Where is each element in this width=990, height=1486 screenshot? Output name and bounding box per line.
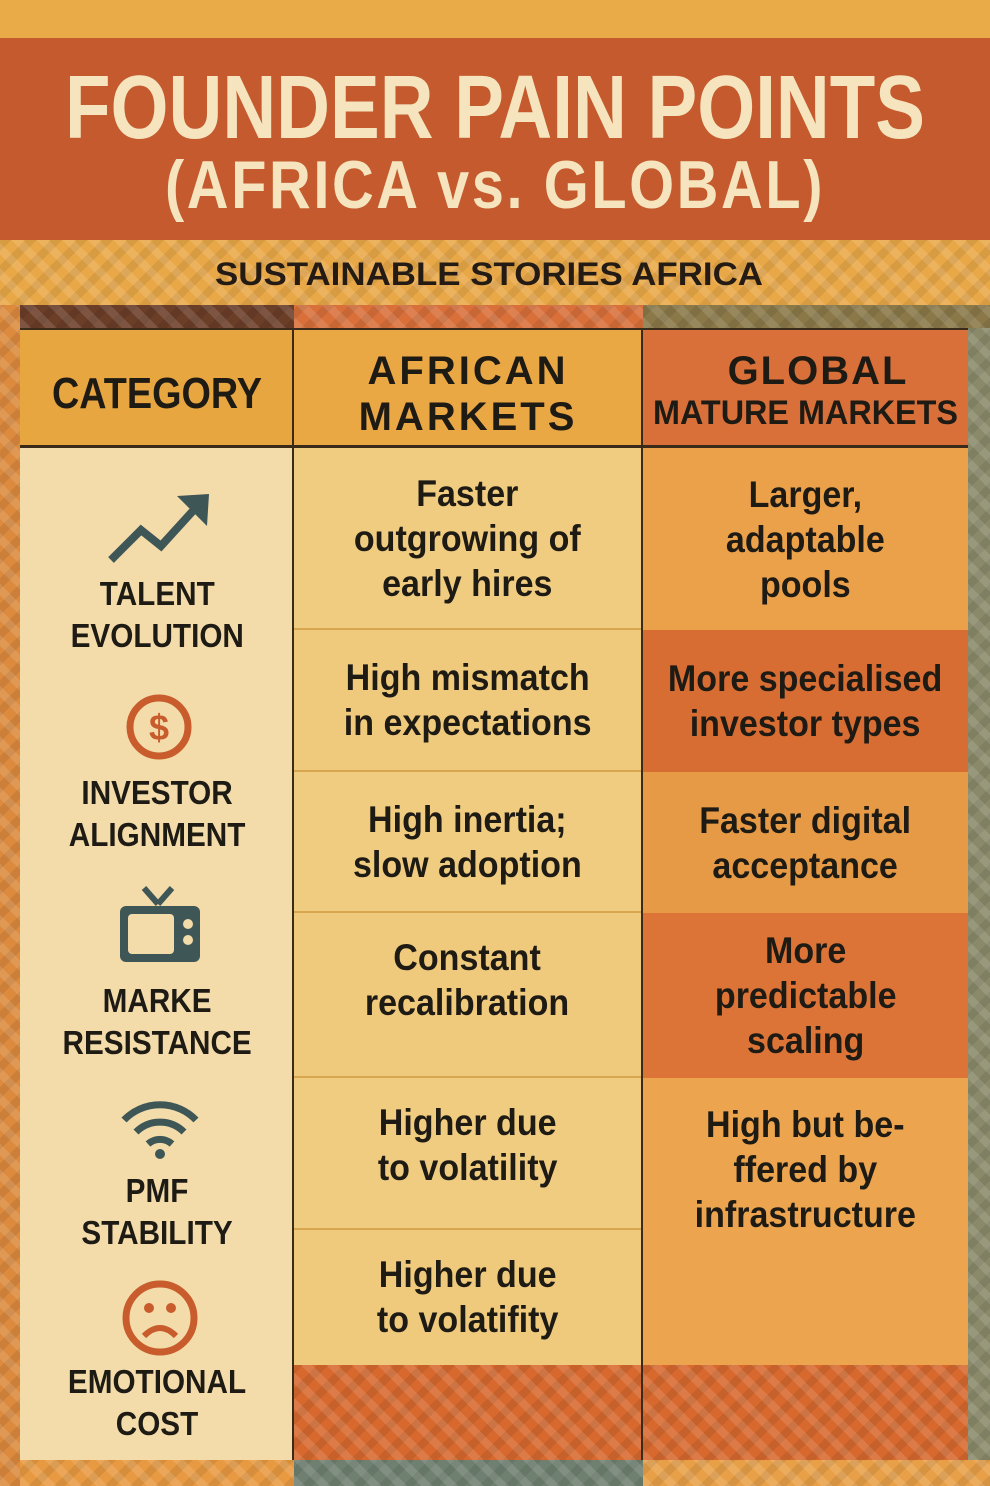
- cell a5: to volatility: [378, 1147, 557, 1188]
- cell a6: to volatiﬁty: [377, 1299, 558, 1340]
- cell a2: in expectations: [344, 702, 591, 743]
- cell g1: pools: [760, 564, 851, 604]
- label: pmf stability: STABILITY: [81, 1214, 233, 1251]
- cell g3: acceptance: [713, 844, 898, 886]
- label: talent evolution: EVOLUTION: [70, 617, 244, 654]
- cell g4: More: [765, 930, 846, 971]
- cell g5: ffered by: [734, 1149, 877, 1190]
- cell a2: High mismatch: [345, 657, 589, 698]
- african column cells: [294, 448, 643, 1460]
- icon: trend arrow: [108, 494, 209, 563]
- label: investor alignment: INVESTOR: [81, 774, 233, 811]
- title: (AFRICA vs. GLOBAL): [165, 147, 825, 223]
- cell g5: High but be-: [706, 1104, 905, 1145]
- category column: [20, 448, 294, 1460]
- title: [65, 58, 925, 223]
- subtitle: SUSTAINABLE STORIES AFRICA: [215, 256, 763, 292]
- title band: [0, 38, 990, 240]
- pattern strips: [20, 305, 294, 328]
- cell g5: infrastructure: [695, 1194, 916, 1235]
- header: global mature markets: MATURE MARKETS: [653, 394, 958, 432]
- label: emotional cost: [68, 1363, 246, 1442]
- cell g2: investor types: [690, 703, 921, 744]
- icon: wifi: [122, 1101, 198, 1159]
- icon: sad face: [122, 1280, 198, 1356]
- cell g3: [643, 772, 968, 913]
- label: investor alignment: ALIGNMENT: [69, 816, 245, 853]
- pattern block g: [643, 1365, 968, 1460]
- cell g2: More specialised: [668, 658, 943, 699]
- icon: tv: [120, 886, 200, 962]
- label: market resistance: RESISTANCE: [62, 1024, 252, 1061]
- header: category: CATEGORY: [52, 369, 262, 418]
- cell a6: Higher due: [379, 1254, 556, 1295]
- bottom strip: [20, 1460, 294, 1486]
- label: emotional cost: EMOTIONAL: [68, 1363, 246, 1400]
- subtitle band: [0, 240, 990, 305]
- header: category: [20, 330, 294, 445]
- cell g1: Larger,: [749, 474, 862, 514]
- cell a1: [294, 448, 641, 630]
- cell a1: outgrowing of: [354, 518, 581, 558]
- cell g4: scaling: [747, 1020, 864, 1061]
- cell a4: [294, 913, 641, 1078]
- cell a3: [294, 772, 641, 913]
- cell a5: [294, 1078, 641, 1230]
- header: african markets: MARKETS: [358, 394, 577, 438]
- label: market resistance: [62, 982, 252, 1061]
- pattern block a: [294, 1365, 641, 1460]
- icon: dollar: $: [149, 707, 169, 748]
- cell g3: Faster digital: [700, 800, 911, 840]
- cell a1: Faster: [416, 472, 519, 514]
- cell a4: Constant: [394, 937, 541, 978]
- cell g2: [643, 630, 968, 772]
- cell g4: [643, 913, 968, 1078]
- header: african markets: AFRICAN: [367, 348, 568, 392]
- cell a3: High inertia;: [368, 798, 567, 840]
- cell a5: Higher due: [379, 1102, 556, 1143]
- label: pmf stability: [81, 1172, 233, 1251]
- label: talent evolution: TALENT: [100, 575, 214, 612]
- global column cells: [643, 474, 968, 1460]
- header: global mature markets: [643, 330, 968, 445]
- icon: dollar: [126, 694, 192, 760]
- label: talent evolution: [70, 575, 244, 654]
- label: investor alignment: [69, 774, 246, 853]
- cell a2: [294, 630, 641, 772]
- header: african markets: [294, 330, 643, 445]
- header: global mature markets: GLOBAL: [728, 348, 908, 392]
- cell a1: early hires: [382, 562, 553, 604]
- cell a3: slow adoption: [353, 844, 582, 884]
- cell g4: predictable: [715, 975, 896, 1016]
- top band: [0, 0, 990, 38]
- cell a6: [294, 1230, 641, 1365]
- label: pmf stability: PMF: [126, 1172, 188, 1209]
- cell g1: [643, 448, 968, 630]
- cell g1: adaptable: [726, 518, 885, 560]
- cell a4: recalibration: [365, 982, 570, 1023]
- label: market resistance: MARKE: [103, 982, 211, 1019]
- label: emotional cost: COST: [116, 1405, 198, 1442]
- cell g5: [643, 1078, 968, 1365]
- header row: [20, 328, 968, 448]
